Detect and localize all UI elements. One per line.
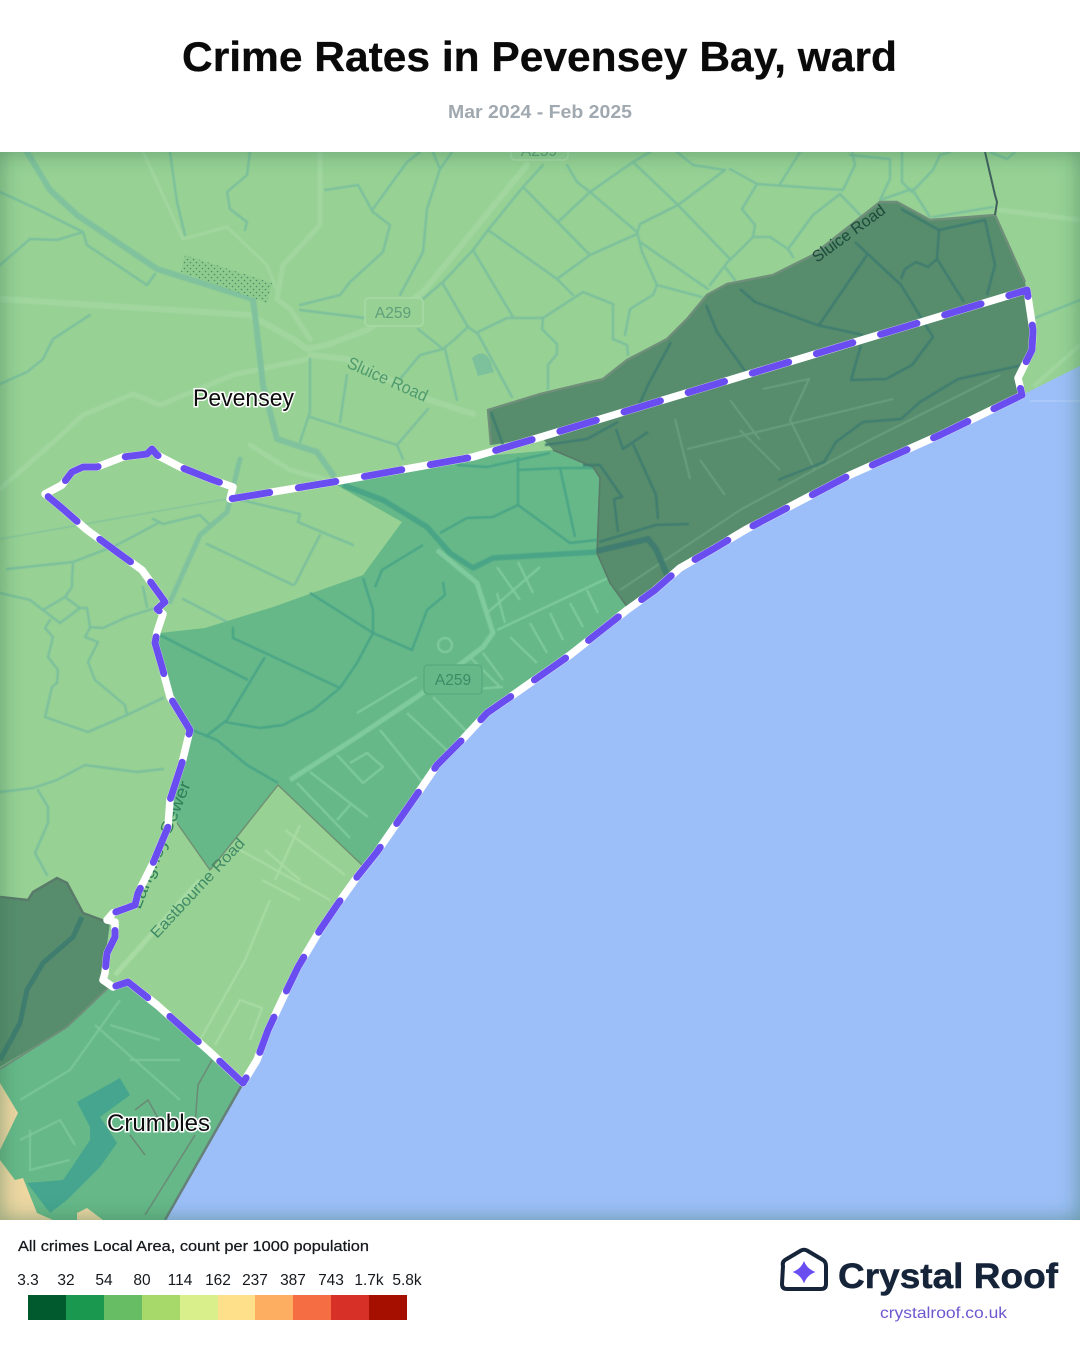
zone: mid green central area: [155, 450, 628, 870]
legend scale labels: 387: [280, 1272, 306, 1289]
zone: south-west dark area: [0, 878, 110, 1067]
legend scale labels: 162: [205, 1272, 231, 1289]
place label Crumbles: Crumbles: [107, 1110, 210, 1137]
legend: [17, 1238, 422, 1320]
label Sluice Road east: Sluice Road: [809, 202, 889, 266]
label Sluice Road west: Sluice Road: [344, 353, 431, 406]
river and Pevensey Haven: [27, 152, 333, 602]
icon: house with star: [782, 1250, 826, 1289]
date range subtitle: Mar 2024 - Feb 2025: [448, 101, 632, 122]
Crumbles harbour teal area: [27, 1078, 130, 1213]
zone: dark green north-east area: [488, 152, 1033, 608]
zone: tan high crime areas: [0, 1083, 103, 1220]
ward boundary: [45, 290, 1033, 1083]
drains and field boundaries: [0, 152, 1080, 875]
road shield A259 central: A259: [435, 672, 471, 689]
legend scale labels: 5.8k: [392, 1272, 422, 1289]
zone: light green south area: [115, 785, 362, 1045]
legend scale labels: 54: [95, 1272, 113, 1289]
header: title and date range: [182, 33, 897, 122]
label Langney Sewer: Langney Sewer: [126, 778, 195, 911]
logo: Crystal Roof: [780, 1248, 1058, 1322]
base land: [0, 152, 1080, 1220]
legend scale labels: 1.7k: [354, 1272, 384, 1289]
map panel: [0, 152, 1080, 1220]
legend scale labels: 32: [57, 1272, 75, 1289]
label Eastbourne Road: Eastbourne Road: [147, 835, 249, 942]
legend scale labels: 237: [242, 1272, 268, 1289]
coastline: [165, 1083, 243, 1220]
legend colour ramp: [28, 1295, 407, 1320]
pond blob: [472, 353, 494, 376]
legend scale labels: [17, 1272, 422, 1289]
wordmark: Crystal Roof: [838, 1257, 1058, 1296]
legend title: All crimes Local Area, count per 1000 population: [18, 1238, 369, 1255]
website url: crystalroof.co.uk: [880, 1305, 1008, 1322]
legend scale labels: 80: [133, 1272, 151, 1289]
sea: [165, 366, 1080, 1220]
road shield A259 top edge: [511, 140, 568, 160]
legend scale labels: 743: [318, 1272, 344, 1289]
road shield A259 north: A259: [375, 305, 411, 322]
light road network: [0, 152, 1080, 489]
road labels: [126, 140, 889, 942]
legend scale labels: 3.3: [17, 1272, 39, 1289]
zone: Crumbles mid green: [0, 982, 243, 1220]
place label Pevensey: Pevensey: [193, 385, 294, 412]
road shield A259 central: [424, 665, 482, 694]
road shield A259 north: [365, 298, 423, 326]
marsh hatch patch: [181, 255, 272, 303]
legend scale labels: 114: [168, 1272, 193, 1289]
title: Crime Rates in Pevensey Bay, ward: [182, 33, 897, 80]
parish boundary line: [985, 152, 997, 215]
